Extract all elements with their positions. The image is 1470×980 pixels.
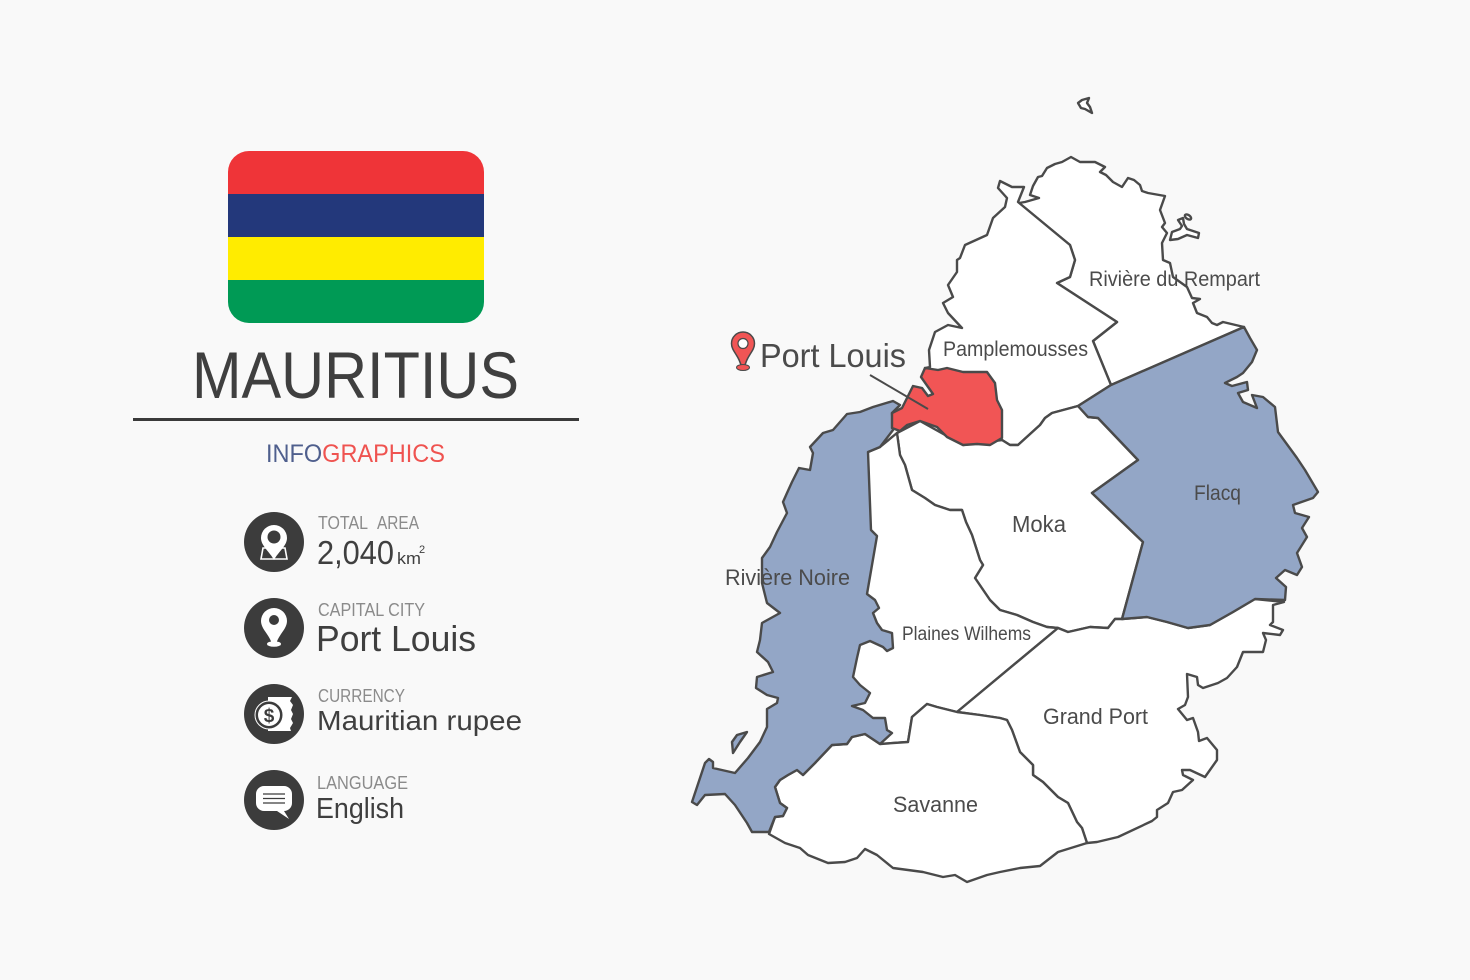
info row: capital city: CAPITAL CITY [318,600,425,620]
region: Pamplemousses [925,181,1117,445]
label: Port Louis: Port Louis [760,337,906,374]
leader line [870,375,928,409]
label: Grand Port: Grand Port [1043,704,1148,729]
label: Plaines Wilhems: Plaines Wilhems [902,624,1031,645]
label: Flacq: Flacq [1194,482,1241,505]
icon: speech bubble [244,770,304,830]
icon: map pin on area [244,512,304,572]
islet: north island [1078,98,1092,113]
label: total area [318,513,419,533]
label: Pamplemousses: Pamplemousses [943,338,1088,361]
info row: language: English [316,793,404,825]
info row: currency: Mauritian rupee [317,705,522,736]
info row: currency: CURRENCY [318,686,405,706]
label: Riviere Noire: Rivière Noire [725,565,850,590]
info row: total area: 2 [419,544,425,556]
info row: capital city: Port Louis [316,618,476,659]
region: Flacq [1078,327,1318,628]
region: Riviere du Rempart [1019,157,1244,385]
icon: location pin [244,598,304,658]
icon: red pin [732,332,754,370]
region: Moka [897,406,1143,632]
subtitle: INFOGRAPHICS [266,440,445,468]
map of Mauritius [692,98,1318,882]
region: Riviere Noire [692,401,900,832]
label: Savanne: Savanne [893,792,978,817]
info row: language [244,770,408,830]
islets: north-east [1170,213,1199,240]
region: Grand Port [957,599,1284,843]
region: Port Louis (highlighted) [892,368,1002,445]
info row: capital city [244,598,476,659]
label: Moka: Moka [1012,511,1066,537]
title: MAURITIUS [192,338,519,412]
region: Plaines Wilhems [840,433,1058,744]
info row: language: LANGUAGE [317,773,408,793]
icon: coins [244,684,304,744]
flag of Mauritius [228,151,484,323]
islet: west lagoon [732,732,747,753]
info row: total area: 2,040 [317,534,394,571]
info row: total area [244,512,425,572]
label: total area: TOTAL [318,513,368,533]
info row: total area: km [397,549,421,568]
label: total area: AREA [377,513,419,533]
label: Riviere du Rempart: Rivière du Rempart [1089,268,1260,291]
icon: coins: $ [264,706,275,727]
region: Savanne [769,704,1087,882]
info row: currency [244,684,522,744]
